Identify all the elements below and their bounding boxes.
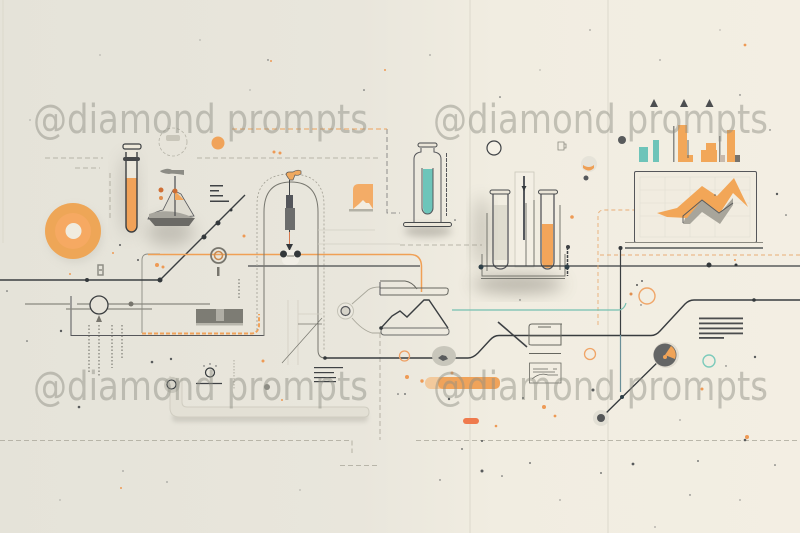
bar chart [639,99,740,162]
icon: orange house tile [349,184,373,212]
main dark line with diagonal [0,195,245,282]
orange speckles [69,44,749,489]
test tube rack [481,172,570,278]
shadows [118,153,564,422]
documents [529,324,562,383]
icon: ring target [211,248,226,276]
orange dashed frame [598,210,800,325]
bottom flowing line [323,298,800,360]
text lines block [699,318,743,339]
text lines near pipe [314,367,343,382]
vial with teal fluid [404,143,452,226]
small glyph [558,142,566,150]
icon: open circle with arrow [90,296,134,322]
arch tube [257,174,400,365]
icon: text lines beside flask [210,185,229,202]
syringe instrument [285,170,301,251]
icon: orange test tube [123,144,141,232]
circuit panel: left frame [25,254,264,376]
dark line under orange [248,265,420,267]
orange ring with specks [630,280,655,304]
orange ring small [584,348,596,360]
icon: sun with bar [196,363,222,384]
small cup icon [581,156,597,180]
triangle markers [650,99,714,107]
laptop area chart panel [625,172,763,248]
orange dashed connector top [232,128,387,130]
dark dot near bars [618,136,626,144]
pie node with diagonal connector [593,342,679,426]
diagonal pen icon [498,322,527,347]
valve node on line [280,250,301,265]
orange pill [425,377,500,389]
red pill [463,418,479,424]
small icon glyph [98,265,103,275]
open circle [487,141,501,155]
teal line [452,303,626,310]
orange ring on line [400,351,410,361]
dot: orange [212,136,224,150]
gray blob node [432,346,456,366]
teal ring [703,355,715,367]
faint dial circle [159,128,187,156]
icon: large orange target circle [45,203,103,263]
pipe icon [164,376,369,417]
thin diagonal and node [234,318,322,390]
watermark bottom left: @diamond prompts [33,364,368,410]
right horizontal dark line [478,262,800,270]
bars [639,125,740,162]
peak chart with ring node [338,281,449,335]
vertical line with top node [618,246,622,392]
orange horizontal line [148,254,422,292]
icon: flask on stand [148,169,195,226]
watermark top left: @diamond prompts [33,97,368,143]
gray textured box [196,309,243,326]
